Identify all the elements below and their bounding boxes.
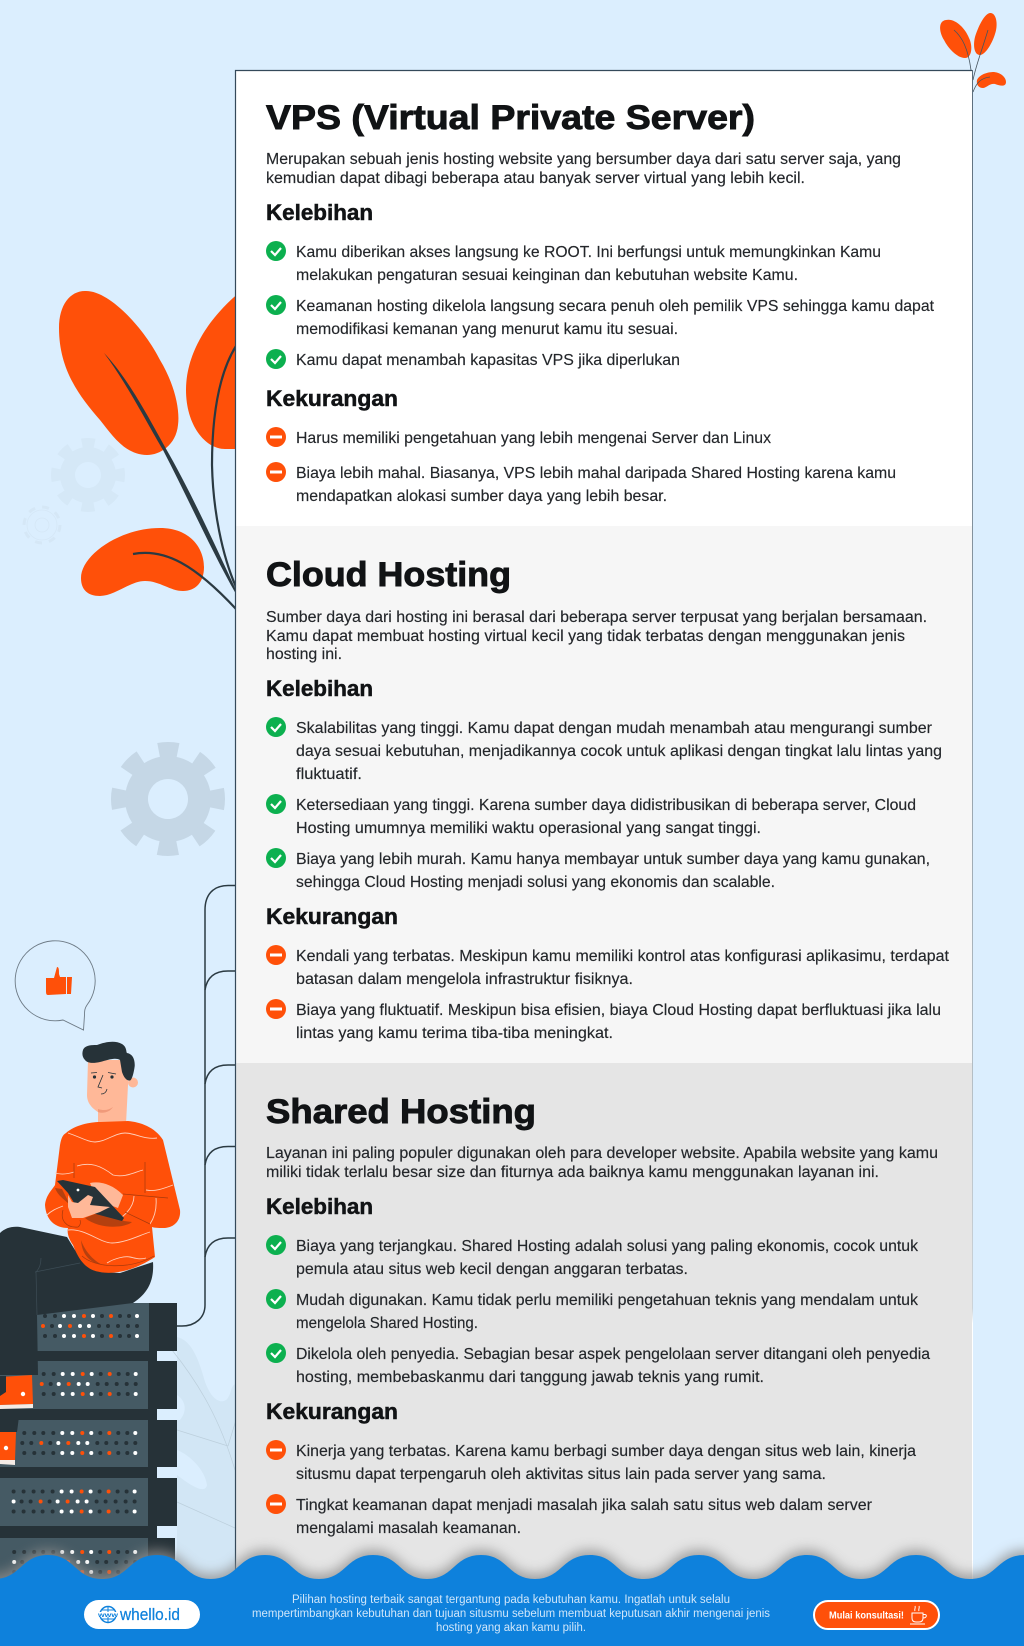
list: Cloud advantages: fluktuatif. (296, 766, 362, 783)
list: VPS advantages: melakukan pengaturan sesuai keinginan dan kebutuhan website Kamu. (296, 267, 798, 284)
list: Shared disadvantages: situsmu dapat terpengaruh oleh aktivitas situs lain pada server yang sama. (296, 1466, 826, 1483)
list: VPS advantages: Keamanan hosting dikelola langsung secara penuh oleh pemilik VPS sehingga kamu dapat (296, 298, 935, 315)
list: Shared disadvantages: Tingkat keamanan dapat menjadi masalah jika salah satu situs web dalam server (296, 1497, 873, 1514)
hands and tablet (90, 1182, 123, 1208)
neck and face (87, 1060, 128, 1124)
list: Shared advantages (266, 1235, 930, 1386)
icon: thumbs up (46, 967, 72, 995)
list: VPS advantages: Kamu diberikan akses langsung ke ROOT. Ini berfungsi untuk memungkinkan Kamu (296, 244, 881, 261)
intro: Cloud Hosting: Kamu dapat membuat hosting virtual kecil yang tidak terbatas dengan menggunakan jenis (266, 628, 905, 645)
footer text: hosting yang akan kamu pilih. (436, 1622, 586, 1634)
sweater (45, 1121, 180, 1273)
icon: pale gear (51, 438, 125, 512)
list: Shared advantages: Biaya yang terjangkau. Shared Hosting adalah solusi yang paling ekonomis, cocok untuk (296, 1238, 919, 1255)
list: Cloud disadvantages: batasan dalam mengelola infrastruktur fisiknya. (296, 971, 633, 988)
heading: Kelebihan: Kelebihan (266, 1194, 373, 1219)
icon: small outlined gear (24, 507, 60, 543)
wave shadow (0, 1550, 1024, 1615)
list: Shared disadvantages: mengalami masalah keamanan. (296, 1520, 521, 1537)
list: VPS disadvantages: mendapatkan alokasi sumber daya yang lebih besar. (296, 488, 667, 505)
icon: globe: www (97, 1613, 118, 1619)
list: Shared disadvantages: Kinerja yang terbatas. Karena kamu berbagi sumber daya dengan situs web lain, kinerja (296, 1443, 916, 1460)
panel: VPS background (235, 70, 973, 526)
list: VPS disadvantages: Harus memiliki pengetahuan yang lebih mengenai Server dan Linux (296, 430, 771, 447)
list: Cloud advantages: Ketersediaan yang tinggi. Karena sumber daya didistribusikan di beberapa server, Cloud (296, 797, 916, 814)
title: VPS: VPS (Virtual Private Server) (266, 99, 755, 137)
hair (82, 1042, 135, 1081)
logo pill: whello.id: whello.id (119, 1605, 180, 1624)
footer text: mempertimbangkan kebutuhan dan tujuan situsmu sebelum membuat keputusan akhir mengenai jenis (252, 1608, 770, 1620)
button: Mulai konsultasi (814, 1601, 939, 1629)
pale background foliage (172, 1337, 236, 1590)
list: Cloud disadvantages: Kendali yang terbatas. Meskipun kamu memiliki kontrol atas konfigurasi aplikasimu, terdapat (296, 948, 950, 965)
title: Shared Hosting: Shared Hosting (266, 1093, 536, 1131)
server rack (0, 1303, 177, 1600)
footer text (252, 1594, 770, 1634)
list: Cloud advantages: sehingga Cloud Hosting menjadi solusi yang ekonomis dan scalable. (296, 874, 775, 891)
intro: Cloud Hosting: hosting ini. (266, 646, 342, 663)
person with tablet (0, 1042, 180, 1465)
list: Cloud advantages: Hosting umumnya memiliki waktu operasional yang sangat tinggi. (296, 820, 761, 837)
heading: Kelebihan: Kelebihan (266, 676, 373, 701)
VPS section (266, 99, 935, 505)
heading: Kekurangan: Kekurangan (266, 1399, 398, 1424)
list: VPS disadvantages: Biaya lebih mahal. Biasanya, VPS lebih mahal daripada Shared Hosting karena kamu (296, 465, 896, 482)
intro: Cloud Hosting: Sumber daya dari hosting ini berasal dari beberapa server terpusat yang berjalan bersamaan. (266, 609, 927, 626)
list: VPS advantages: memodifikasi kemanan yang menurut kamu itu sesuai. (296, 321, 678, 338)
panel: Cloud Hosting background (235, 526, 973, 1063)
list: Cloud disadvantages (266, 945, 950, 1042)
Shared Hosting section (266, 1093, 938, 1537)
title: Cloud Hosting: Cloud Hosting (266, 556, 511, 594)
connector lines from server to panel (175, 886, 235, 1326)
intro: Shared Hosting: miliki tidak terlalu besar size dan fiturnya ada baiknya kamu menggunakan layanan ini. (266, 1164, 879, 1181)
heading: Kelebihan: Kelebihan (266, 200, 373, 225)
list: Cloud advantages (266, 717, 942, 891)
list: Cloud advantages: Biaya yang lebih murah. Kamu hanya membayar untuk sumber daya yang kamu gunakan, (296, 851, 930, 868)
intro: Cloud Hosting (266, 609, 927, 663)
list: Shared advantages: Mudah digunakan. Kamu tidak perlu memiliki pengetahuan teknis yang mendalam untuk (296, 1292, 919, 1309)
footer wave band (0, 1555, 1024, 1646)
plant: small top-right leaves (940, 13, 1006, 92)
panel border (236, 70, 972, 1590)
speech bubble (15, 941, 95, 1030)
legs (0, 1227, 153, 1432)
shoes (0, 1375, 33, 1465)
heading: Kekurangan: Kekurangan (266, 904, 398, 929)
list: Cloud disadvantages: lintas yang kamu terima tiba-tiba meningkat. (296, 1025, 613, 1042)
panel: Shared Hosting background (235, 1063, 973, 1593)
list: Shared advantages: pemula atau situs web kecil dengan anggaran terbatas. (296, 1261, 688, 1278)
facial details (91, 1072, 116, 1094)
list: Shared advantages: mengelola Shared Hosting. (296, 1315, 478, 1332)
list: Shared advantages: Dikelola oleh penyedia. Sebagian besar aspek pengelolaan server ditangani oleh penyedia (296, 1346, 930, 1363)
button: Mulai konsultasi: Mulai konsultasi! (829, 1610, 904, 1622)
intro: VPS: kemudian dapat dibagi beberapa atau banyak server virtual yang lebih kecil. (266, 170, 805, 187)
list: Cloud disadvantages: Biaya yang fluktuatif. Meskipun bisa efisien, biaya Cloud Hosting dapat berfluktuasi jika lalu (296, 1002, 941, 1019)
list: Cloud advantages: Skalabilitas yang tinggi. Kamu dapat dengan mudah menambah atau mengurangi sumber (296, 720, 933, 737)
intro: VPS: Merupakan sebuah jenis hosting website yang bersumber daya dari satu server saja, yang (266, 151, 901, 168)
intro: VPS (266, 151, 901, 187)
intro: Shared Hosting: Layanan ini paling populer digunakan oleh para developer website. Apabila website yang kamu (266, 1145, 938, 1162)
heading: Kekurangan: Kekurangan (266, 386, 398, 411)
logo pill: whello.id (84, 1600, 200, 1629)
icon: large gear (110, 741, 226, 857)
icon: coffee cup (910, 1606, 926, 1624)
footer text: Pilihan hosting terbaik sangat tergantung pada kebutuhan kamu. Ingatlah untuk selalu (292, 1594, 730, 1606)
list: Cloud advantages: daya sesuai kebutuhan, menjadikannya cocok untuk aplikasi dengan tingkat lalu lintas yang (296, 743, 942, 760)
intro: Shared Hosting (266, 1145, 938, 1181)
list: VPS advantages: Kamu dapat menambah kapasitas VPS jika diperlukan (296, 352, 680, 369)
Cloud Hosting section (266, 556, 950, 1042)
plant: large orange leaves (59, 291, 240, 609)
list: VPS disadvantages (266, 427, 896, 505)
list: Shared advantages: hosting, membebaskanmu dari tanggung jawab teknis yang rumit. (296, 1369, 764, 1386)
list: VPS advantages (266, 241, 935, 369)
list: Shared disadvantages (266, 1440, 916, 1537)
